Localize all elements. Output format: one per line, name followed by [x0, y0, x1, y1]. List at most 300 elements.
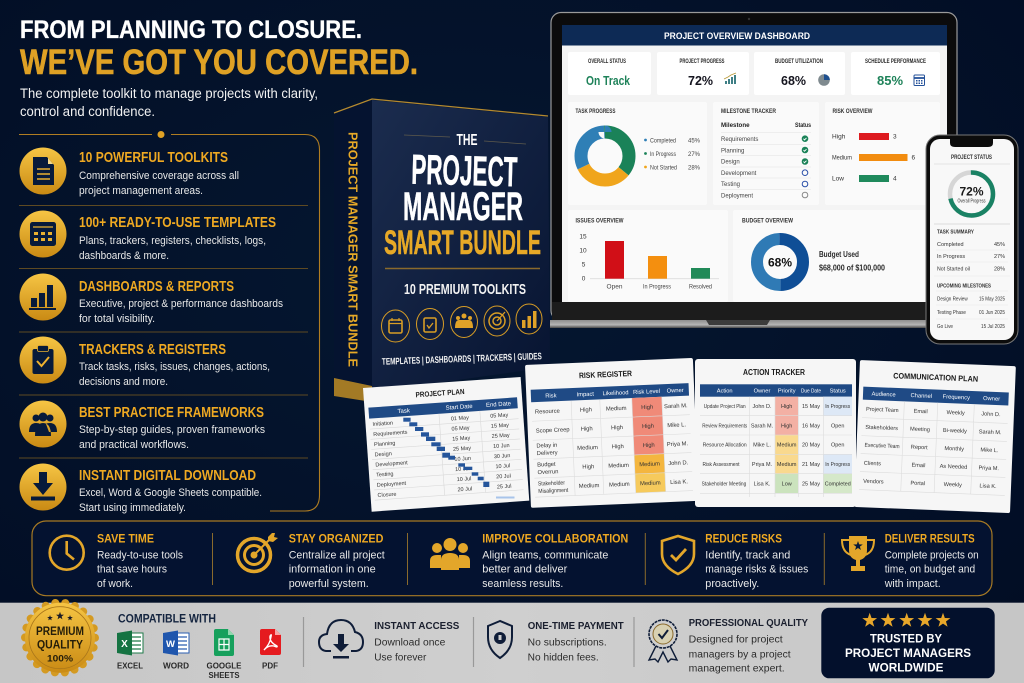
compatible with	[117, 613, 281, 680]
compatible with: SHEETS	[208, 671, 240, 680]
panel: budget overview: 68%	[768, 256, 792, 270]
document: action tracker: Stakeholder Meeting	[702, 482, 746, 488]
document: risk register: Stakeholder	[538, 480, 565, 488]
phone task summary: 28%	[994, 266, 1005, 272]
document: project plan: Requirements	[373, 430, 408, 438]
panel: issues overview: In Progress	[643, 284, 672, 290]
panel: risk overview: Low	[832, 176, 844, 182]
compatible with: WORD	[163, 661, 189, 670]
document: communication plan: Sarah M.	[979, 429, 1002, 436]
benefit: deliver results: DELIVER RESULTS	[885, 532, 975, 546]
panel: issues overview: 5	[582, 262, 586, 268]
box icon fills	[455, 311, 536, 328]
professional quality: managers by a project	[689, 649, 791, 660]
subtitle	[20, 86, 318, 119]
panel: milestone tracker	[713, 102, 819, 205]
panel: risk overview	[825, 102, 940, 205]
panel: task progress: 45%	[688, 138, 701, 144]
phone milestones: 15 Jul 2025	[981, 324, 1005, 330]
KPI cards: OVERALL STATUS	[588, 59, 626, 65]
phone milestones: Design Review	[937, 296, 968, 302]
quality badge	[25, 603, 95, 673]
document: project plan: End Date	[486, 401, 512, 409]
panel: task progress: In Progress	[650, 152, 676, 158]
box title	[384, 132, 541, 298]
document: communication plan: Audience	[871, 391, 896, 398]
feature: best practice frameworks: Step-by-step guides, proven frameworks	[79, 424, 265, 436]
document: risk register: Medium	[579, 483, 600, 490]
panel: milestone tracker: Design	[721, 160, 740, 166]
box title: MANAGER	[403, 185, 523, 229]
panel: task progress: TASK PROGRESS	[576, 108, 616, 115]
panel: issues overview: ISSUES OVERVIEW	[576, 218, 624, 224]
document: action tracker: Priya M.	[752, 462, 773, 468]
benefit: deliver results	[842, 532, 979, 590]
phone status: Overall Progress	[958, 198, 986, 204]
professional quality	[649, 617, 808, 675]
document: risk register: High	[581, 426, 593, 433]
document: action tracker: Due Date	[801, 389, 821, 395]
feature: dashboards and reports	[20, 274, 283, 325]
document: communication plan: Bi-weekly	[943, 428, 967, 435]
document: risk register: Misalignment	[538, 488, 569, 495]
trusted badge: TRUSTED BY	[870, 631, 942, 645]
panel: issues overview: Resolved	[689, 284, 712, 290]
document: project plan: 10 Jul	[457, 476, 472, 483]
document: risk register: Risk Level	[633, 389, 660, 396]
phone milestones	[936, 284, 1008, 330]
document: communication plan: John D.	[981, 411, 1001, 418]
one-time payment	[488, 620, 624, 664]
document: risk register: High	[611, 425, 623, 431]
benefit: save time: of work.	[97, 578, 133, 590]
document: action tracker: Sarah M.	[751, 423, 774, 429]
professional quality: management expert.	[689, 664, 785, 675]
benefit: improve collaboration: IMPROVE COLLABORATION	[482, 532, 628, 546]
KPI cards: 68%	[781, 73, 806, 88]
benefit: deliver results: Complete projects on	[885, 549, 979, 561]
feature: trackers and registers: TRACKERS & REGISTERS	[79, 341, 226, 358]
KPI cards: SCHEDULE PERFORMANCE	[865, 59, 926, 65]
document: project plan: Closure	[377, 492, 397, 499]
phone task summary	[934, 224, 1010, 276]
headline: WE’VE GOT YOU COVERED.	[20, 43, 418, 82]
feature: best practice frameworks: BEST PRACTICE FRAMEWORKS	[79, 404, 264, 421]
benefit: save time: that save hours	[97, 564, 167, 576]
document: risk register	[525, 358, 699, 508]
instant access: INSTANT ACCESS	[374, 620, 459, 632]
document: action tracker: Open	[831, 423, 844, 429]
panel: risk overview: 4	[893, 176, 897, 182]
document: risk register: Medium	[608, 463, 629, 470]
document: risk register: Resource	[535, 409, 560, 416]
document: action tracker: Completed	[825, 482, 851, 488]
benefit: deliver results: time, on budget and	[885, 564, 975, 576]
document: risk register: Overrun	[537, 469, 559, 476]
document: communication plan: Portal	[910, 481, 925, 487]
box title: PROJECT	[411, 146, 518, 195]
document: action tracker: Medium	[777, 443, 797, 449]
benefits bar	[32, 521, 992, 596]
benefit: stay organized: STAY ORGANIZED	[289, 532, 384, 546]
document: project plan: 20 Jul	[496, 473, 511, 480]
document: action tracker: Medium	[777, 462, 797, 468]
feature: best practice frameworks	[20, 400, 265, 451]
document: communication plan: Mike L.	[980, 447, 999, 454]
document: risk register: High	[582, 464, 594, 471]
instant access	[304, 617, 634, 667]
instant access: Use forever	[374, 653, 427, 664]
document: communication plan: Vendors	[863, 479, 884, 486]
document: communication plan: Email	[911, 463, 926, 469]
phone milestones: 01 Jun 2025	[979, 310, 1005, 316]
phone milestones: Go Live	[937, 324, 953, 330]
panel: issues overview: 15	[579, 234, 587, 240]
document: risk register: Lisa K.	[670, 479, 688, 486]
panel: task progress: Not Started	[650, 165, 677, 171]
document: communication plan: Channel	[910, 393, 932, 400]
document: communication plan: Clients	[864, 461, 881, 467]
phone task summary: Completed	[937, 242, 964, 248]
document: project plan: Initiation	[372, 420, 393, 428]
document: action tracker: Risk Assessment	[702, 462, 740, 468]
document: action tracker: High	[781, 423, 792, 429]
document: action tracker: ACTION TRACKER	[743, 368, 805, 377]
feature: 10 powerful toolkits: project management areas.	[79, 185, 203, 197]
panel: risk overview: Medium	[832, 154, 852, 162]
benefit: save time: Ready-to-use tools	[97, 549, 183, 561]
dashboard header: PROJECT OVERVIEW DASHBOARD	[664, 31, 810, 42]
document: communication plan: Monthly	[944, 446, 964, 453]
benefit: improve collaboration: Align teams, communicate	[482, 549, 608, 561]
document: action tracker: High	[781, 404, 792, 410]
panel: milestone tracker: Requirements	[721, 137, 758, 143]
phone milestones: UPCOMING MILESTONES	[937, 284, 991, 290]
document: risk register: John D.	[668, 460, 689, 467]
benefit: stay organized: Centralize all project	[289, 549, 385, 561]
box icons	[382, 304, 542, 342]
panel: risk overview: High	[832, 134, 846, 140]
feature: trackers and registers	[20, 336, 270, 388]
document: communication plan: Owner	[983, 396, 1000, 403]
phone task summary: 45%	[994, 242, 1005, 248]
document: action tracker: John D.	[753, 404, 772, 410]
feature: dashboards and reports: Executive, project & performance dashboards	[79, 298, 283, 310]
document: risk register: High	[580, 407, 592, 414]
feature: ready-to-use templates: Plans, trackers, registers, checklists, logs,	[79, 235, 266, 247]
document: project plan: PROJECT PLAN	[415, 387, 465, 399]
benefit: stay organized: information in one	[289, 564, 376, 576]
KPI cards: 72%	[688, 73, 713, 88]
benefit: save time	[50, 532, 183, 590]
trusted badge: PROJECT MANAGERS	[845, 646, 971, 660]
document: project plan	[363, 377, 529, 512]
one-time payment: No subscriptions.	[528, 638, 607, 649]
headline	[20, 16, 418, 82]
box title: THE	[456, 132, 478, 149]
panel: milestone tracker: MILESTONE TRACKER	[721, 108, 776, 115]
document: communication plan: As Needed	[940, 464, 967, 471]
phone task summary: Not Started oil	[937, 266, 970, 272]
gantt bars	[403, 418, 514, 498]
subtitle: The complete toolkit to manage projects with clarity,	[20, 86, 318, 101]
document: project plan: Deployment	[377, 481, 407, 489]
document: communication plan	[854, 360, 1016, 513]
icon: google sheets	[214, 629, 234, 656]
spine title: PROJECT MANAGER SMART BUNDLE	[346, 132, 360, 367]
box title: 10 PREMIUM TOOLKITS	[404, 281, 526, 298]
feature: instant digital download	[20, 464, 262, 514]
compatible with: EXCEL	[117, 661, 143, 670]
trusted badge	[821, 608, 995, 678]
document: risk register: RISK REGISTER	[579, 369, 632, 380]
KPI cards	[568, 52, 940, 95]
feature: instant digital download: Excel, Word & Google Sheets compatible.	[79, 487, 262, 499]
panel: milestone tracker: Status	[795, 122, 811, 129]
document: action tracker: Action	[717, 389, 733, 395]
box categories: TEMPLATES | DASHBOARDS | TRACKERS | GUIDES	[382, 351, 542, 368]
KPI cards: On Track	[586, 73, 631, 88]
document: communication plan: Email	[914, 409, 928, 415]
document: risk register: High	[642, 424, 654, 430]
feature: best practice frameworks: and practical workflows.	[79, 439, 189, 451]
one-time payment: ONE-TIME PAYMENT	[528, 620, 624, 632]
panel: issues overview	[568, 210, 728, 302]
panel: milestone tracker: Planning	[721, 148, 744, 154]
document: risk register: Medium	[640, 480, 661, 487]
panel: milestone tracker: Development	[721, 171, 757, 177]
benefit: stay organized: powerful system.	[289, 578, 369, 590]
benefit: deliver results: with impact.	[884, 578, 941, 590]
document: action tracker: Low	[782, 482, 792, 488]
document: risk register: High	[643, 443, 655, 449]
benefit: reduce risks: manage risks & issues	[705, 564, 809, 576]
phone	[926, 135, 1018, 344]
subtitle: control and confidence.	[20, 104, 155, 119]
document: action tracker: Review Requirements	[702, 423, 747, 429]
icon: excel: X	[121, 639, 128, 650]
document: communication plan: Project Team	[866, 407, 899, 414]
document: communication plan: Lisa K.	[979, 483, 997, 490]
panel: budget overview: $68,000 of $100,000	[819, 264, 885, 272]
document: action tracker: Owner	[754, 389, 770, 395]
trusted badge: WORLDWIDE	[868, 661, 944, 675]
product box	[334, 99, 550, 402]
document: project plan: Task	[397, 408, 411, 415]
quality badge: PREMIUM	[36, 626, 84, 638]
document: communication plan: Weekly	[944, 482, 962, 489]
panel: task progress: 28%	[688, 165, 701, 171]
feature: instant digital download: INSTANT DIGITAL DOWNLOAD	[79, 467, 256, 484]
document: action tracker: Update Project Plan	[704, 404, 746, 410]
icon: word: W	[166, 639, 175, 650]
panel: risk overview: 6	[912, 154, 916, 162]
document: project plan: 20 Jul	[457, 486, 472, 493]
panel: budget overview: Budget Used	[819, 250, 859, 259]
document: project plan: 25 May	[491, 433, 510, 440]
document: project plan: Start Date	[445, 404, 473, 412]
benefit: improve collaboration	[430, 532, 628, 590]
KPI cards: 85%	[877, 73, 903, 88]
quality badge: 100%	[47, 654, 74, 665]
KPI cards: PROJECT PROGRESS	[680, 59, 724, 65]
document: risk register: Owner	[667, 388, 684, 395]
document: risk register: Budget	[537, 462, 556, 469]
document: project plan: 25 May	[453, 446, 471, 453]
document: action tracker: Mike L.	[753, 443, 771, 449]
feature: ready-to-use templates	[20, 210, 276, 262]
document: action tracker: Open	[831, 443, 844, 449]
document: action tracker	[695, 359, 856, 507]
icon: word	[163, 630, 189, 656]
document: communication plan: Executive Team	[864, 443, 900, 450]
document: action tracker: In Progress	[825, 404, 850, 410]
document: communication plan: Weekly	[946, 410, 965, 417]
phone status	[934, 154, 1010, 216]
panel: milestone tracker: Deployment	[721, 194, 753, 200]
document: risk register: Likelihood	[602, 390, 629, 397]
document: risk register: High	[612, 444, 624, 450]
quality badge: QUALITY	[37, 640, 83, 652]
benefit: reduce risks: Identify, track and	[705, 549, 790, 561]
panel: issues overview: Open	[607, 284, 623, 290]
benefit: reduce risks	[662, 532, 809, 590]
compatible with: PDF	[262, 661, 278, 670]
dashboard header	[562, 25, 947, 46]
document: action tracker: 20 May	[802, 443, 820, 449]
document: risk register: Delay in	[536, 443, 557, 450]
document: project plan: 15 May	[452, 435, 471, 443]
document: action tracker: 15 May	[802, 404, 820, 410]
document: action tracker: Priority	[778, 389, 796, 395]
document: communication plan: COMMUNICATION PLAN	[893, 371, 978, 384]
phone milestones: Testing Phase	[937, 310, 966, 316]
document: project plan: 10 Jun	[454, 456, 471, 463]
panel: budget overview	[733, 210, 947, 302]
phone status: 72%	[959, 184, 984, 198]
document: action tracker: 21 May	[802, 462, 820, 468]
professional quality: Designed for project	[689, 634, 783, 645]
one-time payment: No hidden fees.	[528, 653, 599, 664]
feature: trackers and registers: Track tasks, risks, issues, changes, actions,	[79, 361, 270, 373]
professional quality: PROFESSIONAL QUALITY	[689, 617, 808, 629]
document: risk register: Mike L.	[667, 422, 687, 429]
feature: dashboards and reports: DASHBOARDS & REPORTS	[79, 278, 234, 295]
document: communication plan: Report	[911, 445, 928, 451]
document: project plan: Design	[375, 451, 392, 458]
panel: issues overview: 0	[582, 276, 586, 282]
document: project plan: 05 May	[451, 425, 470, 433]
document: communication plan: Priya M.	[978, 465, 1000, 472]
phone task summary: TASK SUMMARY	[937, 230, 974, 236]
document: risk register: Sarah M.	[664, 403, 688, 410]
compatible with: GOOGLE	[206, 661, 242, 670]
document: action tracker: Lisa K.	[754, 482, 771, 488]
document: action tracker: In Progress	[825, 462, 850, 468]
laptop	[550, 12, 957, 328]
benefit: stay organized	[238, 532, 385, 590]
document: project plan: 01 May	[451, 415, 469, 422]
instant access: Download once	[374, 638, 446, 649]
phone status: PROJECT STATUS	[951, 154, 992, 161]
document: action tracker: Resource Allocation	[703, 443, 747, 449]
document: risk register: High	[641, 405, 653, 411]
document: project plan: 10 Jun	[455, 466, 472, 473]
compatible with: COMPATIBLE WITH	[118, 613, 216, 625]
document: risk register: Medium	[639, 461, 660, 468]
feature: 10 powerful toolkits: 10 POWERFUL TOOLKITS	[79, 149, 228, 166]
benefit: save time: SAVE TIME	[97, 532, 154, 546]
document: project plan: 25 Jul	[497, 484, 512, 491]
headline: FROM PLANNING TO CLOSURE.	[20, 16, 362, 44]
panel: task progress: Completed	[650, 138, 676, 144]
panel: task progress: 27%	[688, 152, 701, 158]
feature: 10 powerful toolkits	[20, 148, 239, 197]
KPI cards: BUDGET UTILIZATION	[775, 59, 823, 65]
document: project plan: 05 May	[490, 412, 509, 420]
document: action tracker: Status	[830, 389, 846, 395]
benefit: improve collaboration: seamless results.	[482, 578, 563, 590]
document: risk register: Impact	[576, 392, 595, 398]
icon: excel	[117, 630, 143, 656]
document: project plan: Planning	[374, 441, 396, 448]
phone milestones: 15 May 2025	[979, 296, 1005, 302]
feature: ready-to-use templates: dashboards & more.	[79, 250, 169, 262]
panel: features list	[19, 131, 320, 514]
box title: SMART BUNDLE	[384, 224, 541, 262]
document: risk register: Medium	[606, 406, 627, 413]
feature: instant digital download: Start using immediately.	[79, 502, 186, 514]
icon: pdf	[260, 629, 281, 655]
panel: milestone tracker: Milestone	[721, 122, 750, 129]
document: project plan: Development	[375, 460, 408, 469]
document: action tracker: 16 May	[802, 423, 820, 429]
phone task summary: In Progress	[937, 254, 965, 260]
panel: issues overview: 10	[579, 248, 587, 254]
feature: ready-to-use templates: 100+ READY-TO-USE TEMPLATES	[79, 214, 276, 231]
panel: risk overview: RISK OVERVIEW	[832, 108, 873, 115]
document: communication plan: Meeting	[910, 427, 930, 433]
document: risk register: Medium	[609, 482, 630, 489]
document: risk register: Priya M.	[667, 441, 689, 448]
document: project plan: 30 Jun	[494, 453, 511, 460]
document: risk register: Scope Creep	[536, 427, 570, 435]
document: communication plan: Frequency	[942, 394, 970, 401]
benefit: improve collaboration: better and deliver	[482, 564, 568, 576]
benefit: reduce risks: proactively.	[705, 578, 759, 590]
document: project plan: Testing	[376, 471, 394, 479]
feature: 10 powerful toolkits: Comprehensive coverage across all	[79, 170, 239, 182]
benefit: reduce risks: REDUCE RISKS	[705, 532, 782, 546]
KPI icons	[724, 73, 924, 86]
document: project plan: 10 Jul	[495, 463, 510, 470]
phone task summary: 27%	[994, 254, 1005, 260]
feature: trackers and registers: decisions and more.	[79, 376, 168, 388]
document: risk register: Delivery	[537, 450, 558, 457]
document: risk register: Medium	[577, 445, 598, 452]
panel: budget overview: BUDGET OVERVIEW	[742, 218, 794, 224]
feature: dashboards and reports: for total visibility.	[79, 313, 155, 325]
document: project plan: 15 May	[491, 423, 509, 430]
document: communication plan: Stakeholders	[865, 425, 898, 432]
document: project plan: 10 Jun	[493, 443, 510, 450]
panel: task progress	[568, 102, 707, 205]
document: action tracker: 25 May	[802, 482, 820, 488]
footer band	[0, 603, 1024, 683]
document: risk register: Risk	[545, 393, 557, 400]
panel: risk overview: 3	[893, 134, 897, 140]
panel: milestone tracker: Testing	[721, 182, 740, 188]
